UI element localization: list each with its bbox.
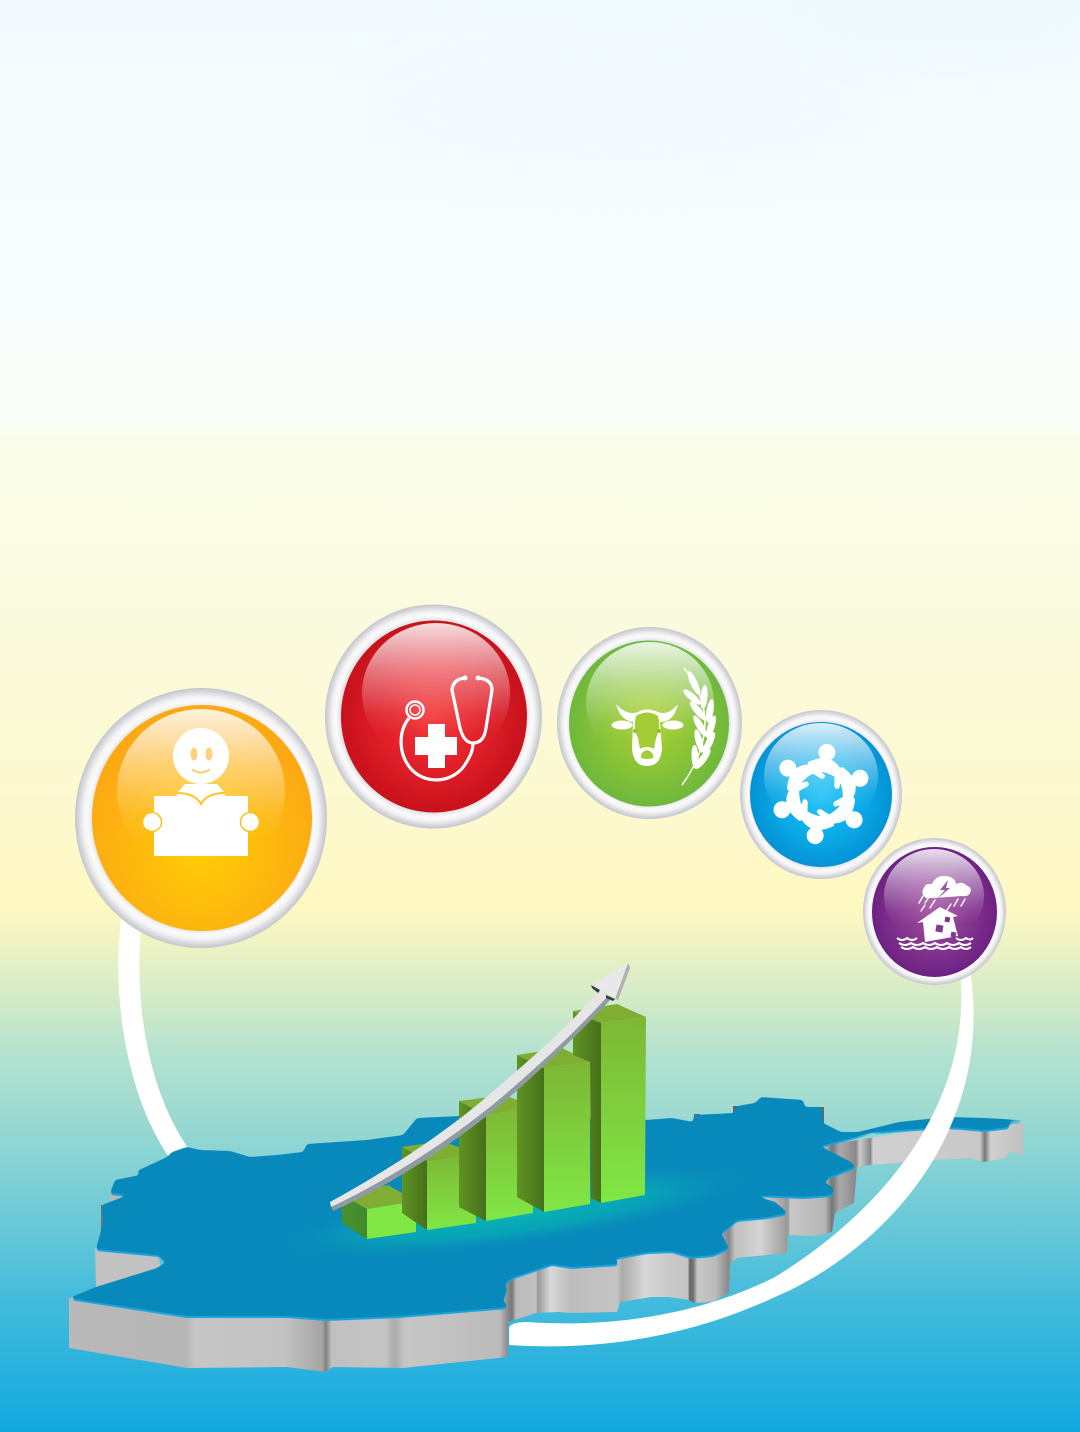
badge: health [325, 604, 542, 828]
icon: person reading [142, 728, 260, 856]
icon: cow head [612, 704, 684, 766]
bar 5 [573, 1004, 646, 1203]
bar 3 [459, 1095, 533, 1221]
map top surface [69, 1097, 1023, 1319]
map top rim [69, 1119, 1023, 1321]
growth arrow [330, 963, 630, 1211]
icon: wheat ear [681, 668, 718, 785]
icon: stethoscope and cross [401, 676, 492, 780]
badge: agriculture [557, 627, 742, 819]
map side walls [69, 1106, 1024, 1372]
white arc: right [509, 970, 974, 1346]
bar 2 [402, 1141, 476, 1230]
badge: community [740, 710, 902, 879]
white arc: left [129, 900, 180, 1155]
glow beneath bars [330, 1175, 700, 1250]
icon: people circle [767, 742, 875, 846]
3D map [69, 1097, 1024, 1372]
badge: disaster [863, 838, 1006, 985]
bar 1 [342, 1185, 416, 1239]
bar chart [342, 1004, 646, 1239]
icon: flood house [897, 876, 973, 949]
bar 4 [517, 1048, 590, 1212]
badge: education [75, 688, 327, 948]
